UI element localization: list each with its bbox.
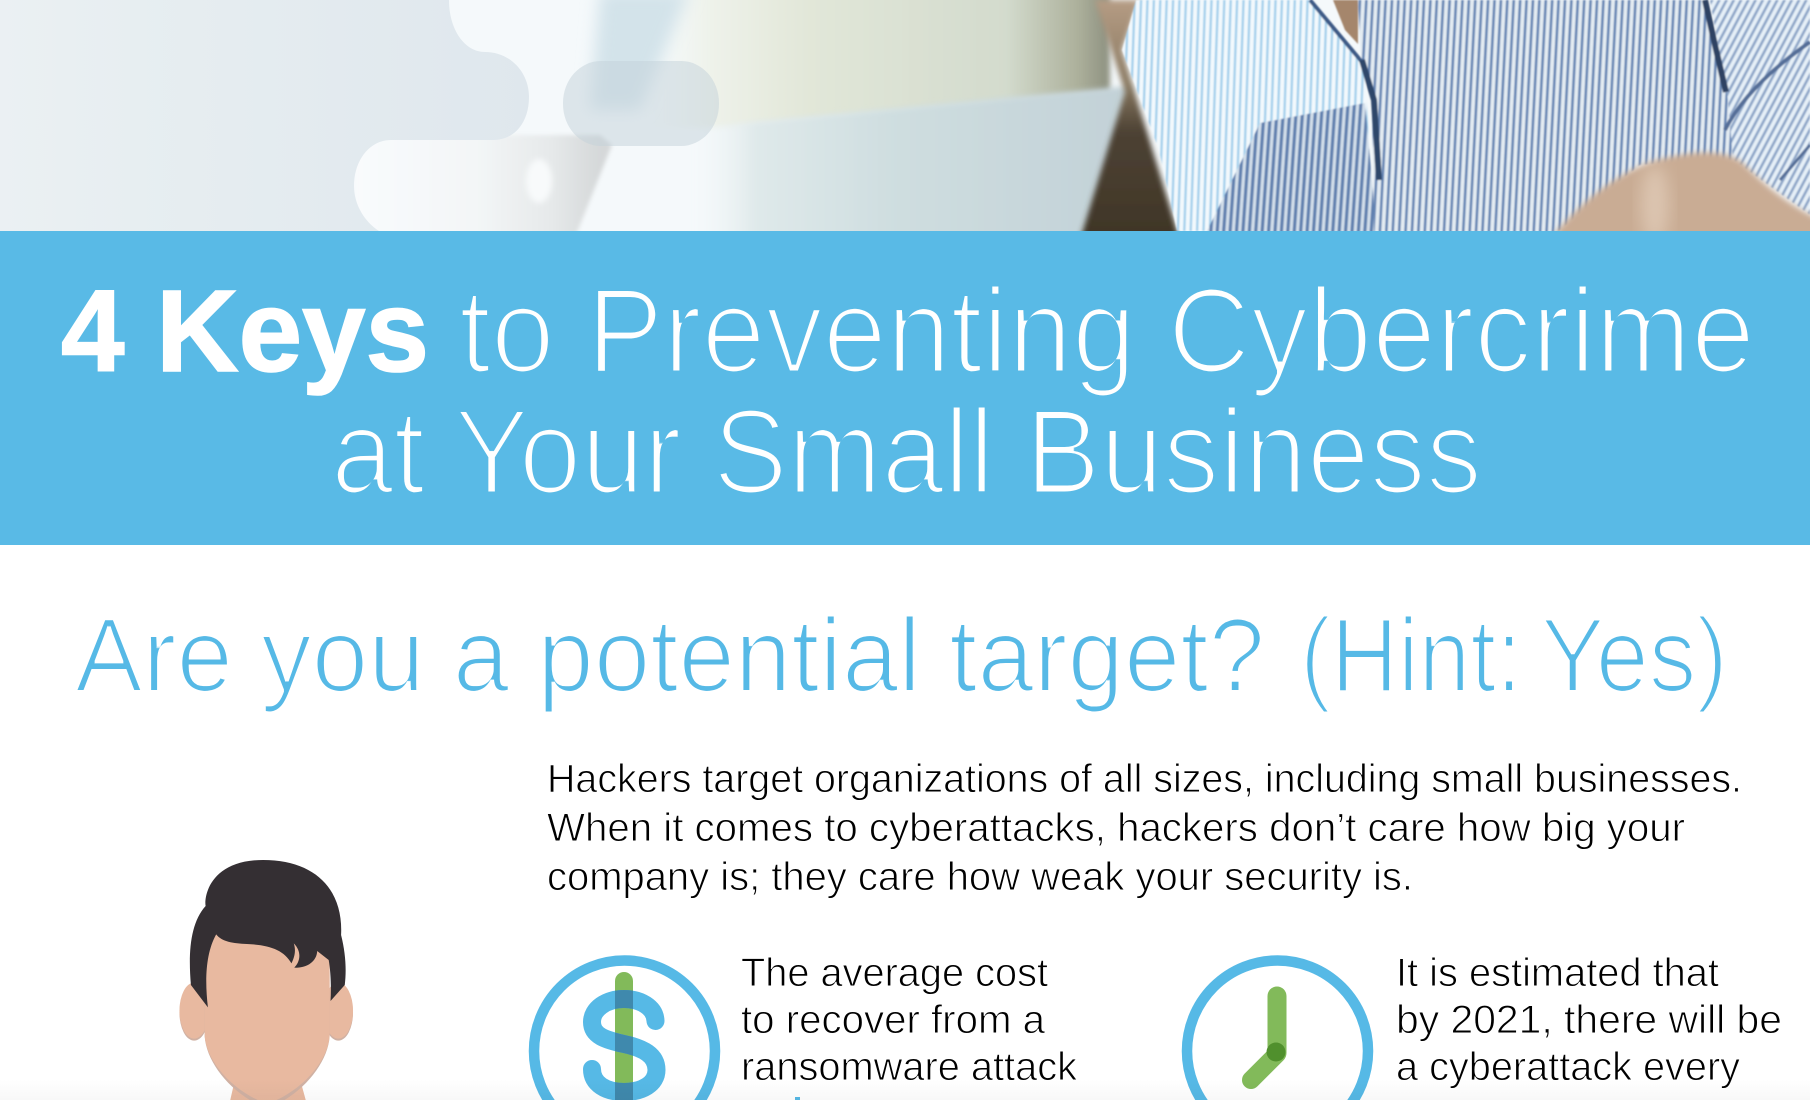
ear shadows [179, 985, 353, 1041]
shirt [1122, 0, 1810, 235]
icon: clock [1187, 960, 1368, 1100]
intro paragraph: When it comes to cyberattacks, hackers don’t care how big your [547, 806, 1685, 850]
title [61, 264, 1755, 519]
subheading: Are you a potential target? [75, 598, 1265, 714]
title: 4 Keys [61, 266, 429, 396]
light background shape [0, 0, 529, 231]
face shadow [205, 927, 330, 1100]
icon: dollar coin [534, 960, 715, 1100]
statistic: ransomware cost: to recover from a [741, 998, 1046, 1042]
statistic: cyberattack frequency: a cyberattack every [1396, 1045, 1740, 1089]
title: to Preventing Cybercrime [459, 264, 1755, 398]
neck [229, 1083, 307, 1100]
title band [0, 231, 1810, 545]
statistic: ransomware cost [741, 951, 1078, 1100]
statistic: ransomware cost: ransomware attack [741, 1045, 1078, 1089]
title: at Your Small Business [331, 385, 1482, 519]
statistic: ransomware cost: The average cost [741, 951, 1048, 995]
face [205, 927, 330, 1100]
translucent pill [563, 61, 719, 146]
hair [190, 860, 346, 1007]
statistic: cyberattack frequency [1396, 951, 1782, 1089]
subheading: (Hint: [1300, 598, 1522, 714]
photo banner: man in striped shirt [0, 0, 1810, 250]
statistic: cyberattack frequency: It is estimated that [1396, 951, 1719, 995]
hand [1552, 149, 1810, 231]
illustration: person [179, 860, 353, 1100]
ears [179, 983, 353, 1039]
intro paragraph: Hackers target organizations of all sizes, including small businesses. [547, 757, 1742, 801]
intro paragraph: company is; they care how weak your security is. [547, 855, 1413, 899]
statistic: cyberattack frequency: by 2021, there will be [1396, 998, 1782, 1042]
intro paragraph [547, 757, 1742, 899]
subheading: Yes) [1541, 598, 1728, 714]
